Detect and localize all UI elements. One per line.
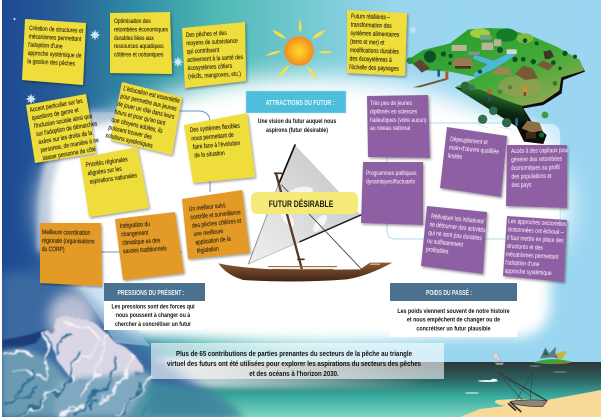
- panel: pressures of the present: nous poussent à changer ou à: [116, 313, 191, 319]
- note: education: pour permettre aux jeunes: [120, 93, 177, 113]
- purple note: reassess initiatives: qui ne sont pas durables: [428, 230, 482, 242]
- purple note: access to capital: des populations et: [511, 173, 552, 181]
- waves foam on the sea: [465, 365, 567, 394]
- text: attractions description: Une vision du futur auquel nous: [258, 119, 337, 125]
- purple note: political programmes: Programmes politiques: [366, 170, 417, 177]
- panel: contributions summary: Plus de 65 contributions de parties prenantes du secteurs de la pêche au triangle: [176, 351, 412, 358]
- purple note: political programmes: [361, 162, 423, 225]
- distant island: [533, 347, 573, 364]
- note: optimisation: [110, 12, 172, 74]
- purple note: sectoral approaches: l'adoption d'une: [505, 260, 540, 268]
- frame line: pressures: [37, 111, 210, 252]
- panel: contributions summary: et des océans à l'horizon 2030.: [249, 371, 339, 378]
- note: creation of structures: approche systémique de: [28, 50, 82, 60]
- note: climate change integration: changement: [121, 230, 149, 239]
- note: regional coordination: du CORP): [42, 246, 65, 254]
- note: gender and inclusion: [26, 94, 102, 163]
- note: climate change integration: Intégration du: [120, 221, 150, 230]
- purple note: political programmes: dynamiques/fluctuants: [366, 179, 415, 186]
- beached catamaran: [497, 372, 547, 412]
- note: resilient futures: (terre et mer) et: [350, 39, 385, 47]
- hull: [218, 263, 392, 282]
- purple note: young graduates: diplômés en sciences: [370, 109, 417, 116]
- purple note: young graduates: Très peu de jeunes: [370, 100, 412, 107]
- note: creation of structures: la gestion des pêches: [27, 59, 75, 68]
- note: optimisation: durables liées aux: [114, 35, 154, 42]
- sail: [248, 145, 361, 264]
- panel: pressures of the present: chercher à concrétiser un futur: [115, 321, 192, 328]
- stars: [14, 18, 417, 104]
- purple note: depopulation: [440, 127, 507, 197]
- note: flexible systems: [184, 113, 255, 183]
- note: gender and inclusion: axées sur les droits de la: [38, 130, 94, 146]
- note: fisheries livelihoods: qui contribuent: [187, 47, 220, 56]
- note: optimisation: Optimisation des: [114, 18, 151, 25]
- purple note: young graduates: halieutiques (voire aucun): [370, 117, 427, 124]
- purple note: sectoral approaches: il faut mettre en place des: [507, 235, 564, 245]
- sea and horizon: [150, 358, 601, 417]
- left white edge: [0, 0, 2, 417]
- central label: desirable future: [251, 192, 358, 214]
- note: resilient futures: modifications durables: [350, 47, 399, 56]
- note: fisheries livelihoods: Des pêches et des: [186, 30, 227, 39]
- note: flexible systems: faire face à l'évolution: [193, 140, 241, 151]
- tree clusters: [407, 38, 577, 138]
- purple note: reassess initiatives: ou suffisamment: [427, 238, 464, 249]
- purple note: sectoral approaches: Les approches sectorielles: [508, 219, 567, 228]
- panel: weight of the past: POIDS DU PASSÉ :: [426, 288, 472, 297]
- central white glow: [37, 76, 570, 340]
- note: fisheries livelihoods: activement à la santé des: [187, 54, 243, 64]
- note: education: que citoyens adultes, ils: [111, 117, 163, 135]
- note: optimisation: ressources aquatiques: [114, 44, 164, 50]
- frame line: weights: [380, 120, 560, 239]
- note: creation of structures: [22, 19, 86, 85]
- panel: contributions summary: virtuel des futurs ont été utilisées pour explorer les aspirations du secteurs des pêches: [167, 361, 421, 368]
- villagers: [437, 69, 527, 126]
- central label: desirable future: FUTUR DÉSIRABLE: [269, 198, 334, 209]
- heading: attractions of the future: [246, 91, 346, 113]
- note: resilient futures: transformation des: [351, 22, 392, 30]
- text: attractions description: aspirons (futur désirable): [266, 128, 328, 134]
- note: monitoring and control: contrôle et surveillance: [190, 210, 241, 222]
- note: fisheries livelihoods: écosystèmes côtiers: [188, 63, 233, 72]
- purple note: access to capital: des pays: [512, 182, 531, 189]
- purple note: access to capital: générer des retombées: [511, 156, 562, 164]
- note: fisheries livelihoods: (récifs, mangroves, etc.): [188, 71, 241, 81]
- purple note: access to capital: Accès à des capitaux pour: [511, 147, 569, 155]
- purple note: access to capital: [506, 145, 570, 208]
- purple note: young graduates: au niveau national: [370, 126, 410, 132]
- note: fisheries livelihoods: [182, 22, 246, 88]
- mangrove roots: [477, 115, 512, 129]
- note: regional priorities: aspirations nationales: [89, 173, 138, 186]
- purple note: depopulation: limitée: [448, 153, 462, 161]
- island shore edge: [455, 62, 585, 144]
- note: gender and inclusion: questions de genre et: [31, 107, 80, 122]
- note: regional priorities: alignées sur les: [87, 166, 122, 178]
- note: monitoring and control: application de la: [195, 236, 232, 247]
- note: resilient futures: Futurs résilients –: [351, 13, 391, 22]
- small distant sailboat: [492, 351, 504, 365]
- note: regional coordination: [40, 223, 102, 286]
- purple note: depopulation: Dépeuplement et: [450, 137, 488, 147]
- buildings: [452, 35, 517, 55]
- huts: [413, 50, 554, 139]
- note: education: L'éducation est essentielle: [122, 86, 180, 105]
- light panel behind the weights: [388, 124, 560, 238]
- note: climate change integration: savoirs traditionnels: [123, 246, 167, 256]
- note: optimisation: retombées économiques: [114, 27, 168, 34]
- island ground: [407, 28, 584, 106]
- note: monitoring and control: Un meilleur suivi,: [189, 203, 227, 213]
- note: education: de jouer un rôle dans leurs: [117, 101, 175, 121]
- note: resilient futures: des écosystèmes à: [349, 56, 393, 64]
- sand beach: [460, 390, 601, 417]
- note: optimisation: côtières et océaniques: [114, 52, 163, 59]
- note: gender and inclusion: laisser personne de côté: [42, 146, 96, 162]
- canoe on the shore: [413, 78, 447, 87]
- heading: attractions of the future: ATTRACTIONS DU FUTUR :: [266, 99, 334, 107]
- purple note: reassess initiatives: se détourner des activités: [429, 222, 486, 234]
- river: [473, 50, 517, 78]
- panel: weight of the past: concrétiser un futur plausible: [416, 326, 491, 333]
- note: creation of structures: Création de structures et: [29, 26, 84, 35]
- note: gender and inclusion: l'inclusion sociale ainsi que: [34, 113, 93, 130]
- sail emblem: [278, 184, 329, 234]
- note: regional coordination: régionale (organisations: [42, 238, 95, 246]
- note: education: futurs et pour qu'en tant: [114, 109, 166, 127]
- purple note: depopulation: main-d'œuvre qualifiée: [449, 145, 499, 156]
- note: resilient futures: systèmes alimentaires: [350, 30, 399, 39]
- purple note: young graduates: [367, 95, 430, 158]
- purple note: reassess initiatives: profitables: [425, 247, 449, 256]
- boat with sail: [218, 145, 392, 282]
- note: monitoring and control: [182, 190, 250, 259]
- note: education: puissent trouver des: [108, 125, 153, 141]
- note: creation of structures: l'adoption d'une: [28, 42, 63, 51]
- note: resilient futures: [347, 10, 407, 76]
- note: flexible systems: Des systèmes flexibles: [190, 123, 240, 134]
- note: regional priorities: Priorités régionales: [85, 157, 128, 169]
- rigging and masts: [248, 145, 361, 269]
- panel: weight of the past: Les poids viennent souvent de notre histoire: [397, 309, 510, 315]
- island village illustration: [407, 28, 585, 144]
- note: fisheries livelihoods: moyens de subsistance: [186, 38, 238, 48]
- panel: pressures of the present: PRESSIONS DU PRÉSENT :: [118, 288, 184, 297]
- note: monitoring and control: des pêches côtières et: [192, 218, 242, 230]
- note: flexible systems: de la situation: [194, 150, 225, 160]
- note: flexible systems: nous permettant de: [191, 132, 234, 143]
- note: resilient futures: l'échelle des paysages: [349, 64, 399, 73]
- note: regional priorities: [80, 147, 149, 217]
- wave illustration: [0, 272, 245, 417]
- purple note: access to capital: économiques au profit: [511, 165, 560, 172]
- panel: weight of the past: [390, 283, 517, 337]
- note: regional coordination: Meilleure coordination: [42, 229, 90, 237]
- hills: [496, 28, 517, 42]
- note: monitoring and control: une meilleure: [193, 229, 224, 238]
- purple note: sectoral approaches: cloisonnées ont échoué –: [507, 227, 564, 237]
- panel: weight of the past: et nous empêchent de changer ou de: [407, 317, 501, 324]
- note: gender and inclusion: sur l'adoption de démarches: [36, 121, 98, 138]
- panel: contributions summary: [151, 343, 444, 379]
- note: climate change integration: climatique es des: [122, 238, 161, 247]
- purple note: sectoral approaches: structures et des: [506, 243, 543, 252]
- sun: [265, 19, 333, 80]
- purple note: reassess initiatives: Réévaluer les initiatives/: [431, 214, 485, 226]
- note: gender and inclusion: personne, de manière à ne: [40, 138, 99, 154]
- note: gender and inclusion: Accent particulier sur les: [29, 98, 83, 114]
- note: education: [105, 82, 182, 155]
- note: climate change integration: [115, 212, 184, 280]
- purple note: sectoral approaches: [503, 216, 567, 282]
- note: creation of structures: mécanismes permettant: [28, 34, 82, 43]
- note: monitoring and control: législation: [197, 246, 219, 255]
- panel: pressures of the present: [104, 283, 205, 330]
- note: education: solutions systémiques: [105, 133, 153, 150]
- panel: pressures of the present: Les pressions sont des forces qui: [111, 304, 195, 311]
- purple note: sectoral approaches: approche systémique: [505, 268, 552, 277]
- purple note: reassess initiatives: [421, 206, 487, 274]
- purple note: sectoral approaches: mécanismes permettant: [506, 252, 559, 261]
- shaded shore strip: [457, 89, 528, 125]
